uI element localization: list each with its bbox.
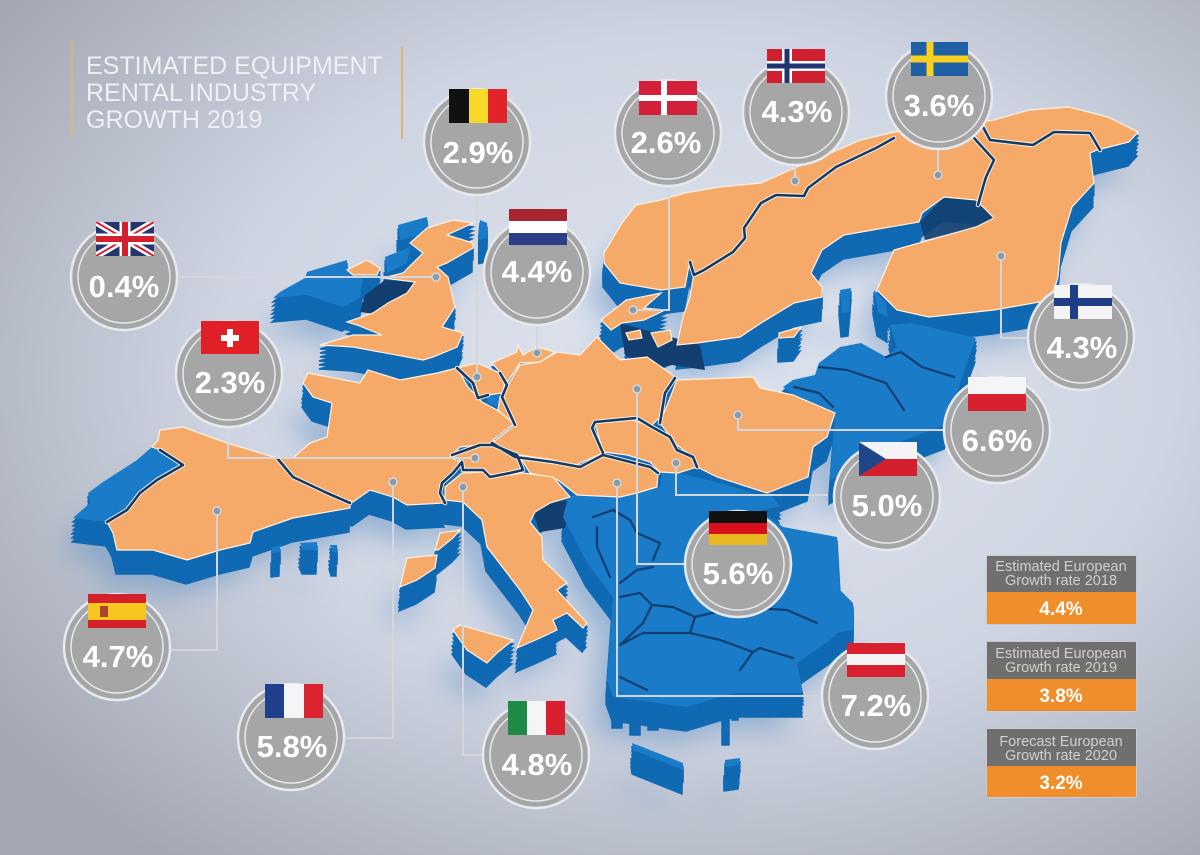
box: Estimated European Growth rate 2018: Estimated European: [995, 559, 1127, 575]
title block: ESTIMATED EQUIPMENT: [86, 52, 383, 80]
title block: GROWTH 2019: [86, 106, 262, 134]
marker: Denmark 2.6%: [615, 80, 721, 186]
marker: United Kingdom 0.4%: 0.4%: [89, 269, 159, 304]
marker: France 5.8%: 5.8%: [257, 729, 327, 764]
leader lines: [170, 148, 1029, 755]
marker: Poland 6.6%: [944, 377, 1050, 483]
marker: Czech Republic 5.0%: [834, 442, 940, 550]
box: Estimated European Growth rate 2019: Estimated European: [995, 646, 1127, 662]
marker: Poland 6.6%: 6.6%: [962, 423, 1032, 458]
marker: France 5.8%: [238, 684, 344, 790]
marker: Sweden 3.6%: 3.6%: [904, 88, 974, 123]
marker: Italy 4.8%: 4.8%: [502, 747, 572, 782]
box: Estimated European Growth rate 2019: 3.8%: [1039, 686, 1083, 707]
marker: United Kingdom 0.4%: [71, 222, 177, 330]
marker: Austria 7.2%: [822, 643, 928, 749]
marker: Netherlands 4.4%: 4.4%: [502, 254, 572, 289]
marker: Finland 4.3%: 4.3%: [1047, 330, 1117, 365]
dark sea shadows: [360, 197, 994, 692]
marker: Czech Republic 5.0%: 5.0%: [852, 488, 922, 523]
box: Forecast European Growth rate 2020: Growth rate 2020: [1005, 748, 1117, 764]
marker: Switzerland 2.3%: 2.3%: [195, 365, 265, 400]
marker: Belgium 2.9%: 2.9%: [443, 135, 513, 170]
title block: [71, 40, 403, 139]
marker: Austria 7.2%: 7.2%: [841, 688, 911, 723]
box: Estimated European Growth rate 2018: Growth rate 2018: [1005, 573, 1117, 589]
marker: Italy 4.8%: [483, 701, 589, 808]
box: Estimated European Growth rate 2018: [986, 555, 1137, 625]
box: Forecast European Growth rate 2020: Forecast European: [999, 734, 1123, 750]
marker: Switzerland 2.3%: [176, 321, 282, 427]
box: Estimated European Growth rate 2019: Growth rate 2019: [1005, 660, 1117, 676]
marker: Belgium 2.9%: [424, 89, 530, 195]
box: Estimated European Growth rate 2018: 4.4%: [1039, 599, 1083, 620]
marker: Germany 5.6%: [685, 511, 791, 617]
marker: Spain 4.7%: [64, 594, 170, 700]
title block: RENTAL INDUSTRY: [86, 79, 316, 107]
marker: Netherlands 4.4%: [484, 209, 590, 325]
box: Forecast European Growth rate 2020: [986, 728, 1137, 798]
marker: Sweden 3.6%: [886, 42, 992, 149]
marker: Norway 4.3%: 4.3%: [762, 94, 832, 129]
box: Estimated European Growth rate 2019: [986, 641, 1137, 712]
marker: Spain 4.7%: 4.7%: [83, 639, 153, 674]
marker: Finland 4.3%: [1028, 284, 1134, 390]
Greek peninsula teeth: [612, 690, 738, 745]
marker: Norway 4.3%: [743, 49, 849, 165]
marker: Germany 5.6%: 5.6%: [703, 556, 773, 591]
map of Europe: [59, 107, 1138, 808]
marker: Denmark 2.6%: 2.6%: [631, 125, 701, 160]
box: Forecast European Growth rate 2020: 3.2%: [1039, 773, 1083, 794]
